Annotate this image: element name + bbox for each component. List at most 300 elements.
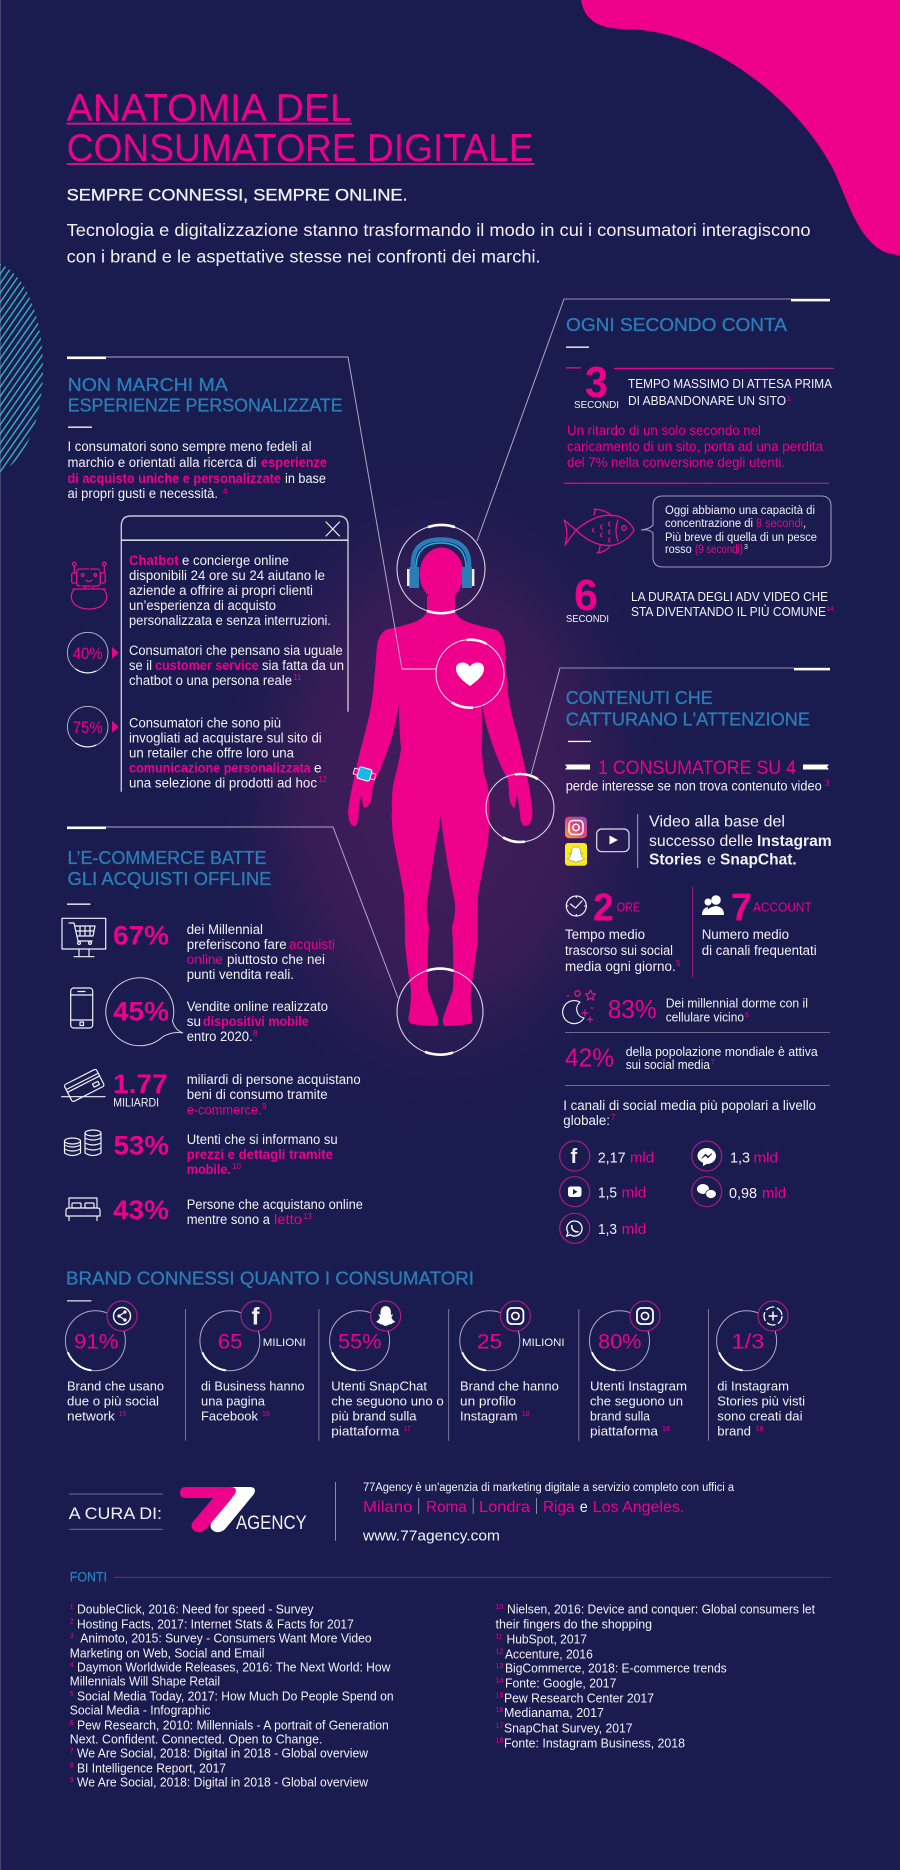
heading: GLI ACQUISTI OFFLINE [68, 868, 272, 889]
sources: left column: BI Intelligence Report, 2017 [77, 1760, 226, 1775]
text: video: SnapChat. [720, 851, 797, 868]
text: social channels: I canali di social media più popolari a livello [563, 1098, 816, 1113]
sources: left column: Daymon Worldwide Releases, 2016: The Next World: How [77, 1660, 391, 1675]
stat: youtube [560, 1177, 646, 1207]
icon: credit card [62, 1069, 105, 1102]
sources: left column: Pew Research, 2010: Millennials - A portrait of Generation [77, 1718, 389, 1733]
stat: 2 ore [565, 887, 681, 974]
text: 67%: dei Millennial [187, 922, 263, 937]
text: 40%: sia fatta da un [262, 658, 344, 673]
callout: speech bubble: rosso [665, 544, 692, 556]
stat: 65 milioni: di Business hanno [201, 1379, 305, 1394]
stat: 83%: 6 [745, 1012, 749, 1019]
head circle [397, 525, 485, 613]
stat: 25 milioni: 25 [477, 1330, 502, 1354]
sources: left column: 8 [70, 1763, 74, 1770]
stat: 75%: 75% [73, 718, 103, 737]
heart circle [436, 640, 504, 708]
sources: left column: Hosting Facts, 2017: Internet Stats & Facts for 2017 [77, 1616, 354, 1631]
sources: right column: Medianama, 2017 [504, 1705, 604, 1720]
pink paragraph [567, 422, 823, 470]
sources: left column: DoubleClick, 2016: Need for speed - Survey [77, 1602, 314, 1617]
sources: right column: 16 [496, 1707, 504, 1714]
stat: 80%: 80% [598, 1330, 642, 1354]
sources: right column: their fingers do the shopping [496, 1617, 652, 1632]
stat: 7 account: ACCOUNT [753, 901, 812, 915]
icon: instagram outline [630, 1301, 660, 1331]
stat: facebook: 2,17 [598, 1149, 626, 1166]
text: 67% [187, 922, 335, 982]
decorative striped shape [0, 262, 43, 474]
stat: 55%: piattaforma [331, 1424, 400, 1439]
stat: 80% [590, 1301, 687, 1439]
sources: right column: Pew Research Center 2017 [504, 1690, 654, 1705]
sources: left column: We Are Social, 2018: Digital in 2018 - Global overview [77, 1775, 369, 1790]
text: 45%: su [187, 1014, 201, 1029]
icon: stories plus [758, 1301, 788, 1331]
text: 75%: e [314, 761, 322, 776]
stat: 1/3: Stories più visti [717, 1394, 805, 1409]
callout: speech bubble: , [803, 518, 806, 530]
sources: left column: 2 [70, 1619, 74, 1626]
text: 75% [129, 716, 327, 791]
stat: 55%: più brand sulla [331, 1409, 417, 1424]
stat: 6 secondi: STA DIVENTANDO IL PIÙ COMUNE [631, 604, 826, 619]
hand circle [486, 774, 554, 842]
text: 75%: 12 [318, 775, 327, 784]
subtitle: SEMPRE CONNESSI, SEMPRE ONLINE. [67, 186, 408, 205]
stat: 1/3: 18 [756, 1424, 764, 1433]
connector line to feet [67, 826, 398, 998]
text: agency description: www.77agency.com [362, 1528, 500, 1545]
stat: 1 consumatore su 4 [565, 758, 830, 794]
icon: people [702, 895, 724, 915]
stat: 3 secondi: DI ABBANDONARE UN SITO [628, 393, 786, 408]
text: 45% [187, 999, 328, 1044]
text: 75%: una selezione di prodotti ad hoc [129, 776, 317, 791]
stat: 55%: 17 [404, 1424, 410, 1433]
icon: share [107, 1301, 137, 1331]
callout: speech bubble: 8 secondi [756, 518, 803, 530]
stat: 6 secondi: 14 [826, 606, 834, 613]
stat: 67%: 67% [113, 920, 169, 950]
sources: left column: Marketing on Web, Social and Email [70, 1645, 264, 1660]
stat: 65 milioni: 65 [218, 1330, 242, 1354]
text: agency description: Roma [426, 1499, 467, 1516]
body silhouette [348, 548, 532, 1026]
stat: wechat: mld [762, 1185, 786, 1202]
stat: 25 milioni: un profilo [460, 1394, 516, 1409]
intro text: marchio e orientati alla ricerca di [68, 455, 256, 470]
stat: messenger [692, 1141, 778, 1171]
text: chatbot: aziende a offrire ai propri clienti [129, 583, 313, 598]
callout: speech bubble: (9 secondi) [695, 544, 743, 556]
sources: left column: 4 [70, 1662, 74, 1669]
connector line to heart [67, 356, 436, 669]
icon: snapchat ghost [371, 1301, 401, 1331]
sources: right column: 13 [496, 1663, 504, 1670]
stat: messenger: 1,3 [730, 1149, 750, 1166]
text: agency description: Londra [479, 1499, 530, 1516]
sources: right column: 18 [496, 1738, 504, 1744]
stat: 6 secondi: LA DURATA DEGLI ADV VIDEO CHE [631, 589, 828, 604]
stat: 53%: 53% [114, 1130, 169, 1160]
text: social channels [563, 1098, 816, 1128]
text: 75%: un retailer che offre loro una [129, 746, 294, 761]
logo: 77 agency: AGENCY [236, 1513, 307, 1534]
icon: snapchat [565, 843, 587, 866]
stat: 1/3 [717, 1301, 805, 1439]
sources: right column: HubSpot, 2017 [506, 1631, 587, 1646]
text: 40%: Consumatori che pensano sia uguale [129, 643, 343, 658]
icon: moon and stars [563, 990, 596, 1024]
text: 43%: 13 [303, 1212, 312, 1221]
text: 43%: letto [274, 1212, 302, 1227]
stat: 91%: due o più social [67, 1394, 159, 1409]
icon: headphones [407, 540, 474, 588]
sources: right column: 10 [496, 1604, 504, 1611]
stat: 40% [67, 632, 119, 673]
sources: left column: 3 [70, 1633, 74, 1640]
text: 1.77 [187, 1072, 361, 1117]
pink paragraph: caricamento di un sito, porta ad una perdita [567, 438, 823, 454]
callout: speech bubble: Più breve di quella di un pesce [665, 532, 817, 544]
stat: wechat [692, 1177, 786, 1207]
callout: speech bubble [641, 496, 831, 567]
icon: facebook: f [252, 1304, 260, 1330]
icon: coins [64, 1130, 101, 1156]
stat: 1 consumatore su 4: perde interesse se non trova contenuto video [566, 779, 822, 794]
stat: 91%: 15 [118, 1409, 126, 1418]
text: agency description: Milano [363, 1499, 412, 1516]
stat: 91%: Brand che usano [67, 1379, 164, 1394]
stat: 43%: 43% [113, 1195, 169, 1225]
stat: 6 secondi: SECONDI [566, 613, 609, 625]
panel: contenuti che catturano l'attenzione [531, 668, 832, 1243]
text: video: Stories [649, 851, 702, 868]
text: 45%: entro 2020. [187, 1029, 253, 1044]
text: chatbot [129, 553, 331, 628]
stat: youtube: 1,5 [598, 1184, 617, 1201]
stat: 91%: 91% [74, 1330, 118, 1354]
icon: video play [597, 829, 629, 852]
sources: left column: Next. Confident. Connected. Open to Change. [70, 1732, 322, 1747]
heading: CATTURANO L'ATTENZIONE [566, 709, 810, 730]
stat: wechat: 0,98 [729, 1185, 757, 1202]
stat: 1 consumatore su 4: 3 [825, 779, 830, 788]
panel: non marchi ma esperienze personalizzate [67, 356, 436, 792]
sources: right column: Fonte: Google, 2017 [505, 1675, 616, 1690]
connector line to hand [531, 668, 830, 774]
sources: right column: BigCommerce, 2018: E-commerce trends [505, 1661, 727, 1676]
stat: 83% [563, 990, 808, 1025]
text: social channels: 7 [611, 1113, 616, 1122]
intro paragraph: con i brand e le aspettative stesse nei confronti dei marchi. [67, 247, 541, 267]
stat: 7 account: di canali frequentati [702, 943, 817, 958]
text: 75%: invogliati ad acquistare sul sito di [129, 731, 322, 746]
text: 1.77: 9 [262, 1102, 267, 1111]
intro paragraph [67, 220, 811, 267]
stat: 80%: brand sulla [590, 1409, 651, 1424]
stat: 42%: 7 [711, 1059, 715, 1066]
icon: bed [66, 1198, 100, 1220]
text: agency description: 77Agency è un'agenzia di marketing digitale a servizio completo con uffici a [363, 1482, 735, 1494]
text: 53%: mobile. [187, 1162, 231, 1177]
text: chatbot: personalizzata e senza interruzioni. [129, 613, 331, 628]
intro paragraph: Tecnologia e digitalizzazione stanno trasformando il modo in cui i consumatori interagiscono [67, 220, 811, 240]
sources: left column: We Are Social, 2018: Digital in 2018 - Global overview [77, 1746, 369, 1761]
intro text: ai propri gusti e necessità. [68, 486, 218, 501]
stat: 40%: 40% [73, 644, 103, 663]
text: 40% [129, 643, 344, 688]
text: 43%: Persone che acquistano online [187, 1197, 363, 1212]
text: video: Video alla base del [649, 814, 785, 831]
text: chatbot: e concierge online [182, 553, 289, 568]
stat: 65 milioni: Facebook [201, 1409, 258, 1424]
callout: speech bubble: 3 [744, 544, 748, 551]
text: agency description: e [580, 1499, 588, 1516]
stat: 1/3: sono creati dai [717, 1409, 803, 1424]
pink paragraph: del 7% nella conversione degli utenti. [567, 454, 785, 470]
icon: instagram outline [500, 1301, 530, 1331]
sources: left column: Millennials Will Shape Retail [70, 1674, 220, 1689]
intro text: I consumatori sono sempre meno fedeli al [68, 439, 312, 454]
text: 75%: Consumatori che sono più [129, 716, 281, 731]
decorative pink blob [581, 0, 900, 255]
stat: facebook [560, 1141, 654, 1171]
stat: 83%: cellulare vicino [666, 1011, 744, 1025]
text: agency description: Riga [543, 1499, 575, 1516]
text: social channels: globale: [563, 1113, 610, 1128]
stat: whatsapp [560, 1213, 646, 1243]
stat: 55% [330, 1301, 444, 1439]
text: video: Instagram [757, 833, 832, 850]
logo: 77 agency [180, 1487, 307, 1534]
heading: OGNI SECONDO CONTA [566, 314, 788, 335]
stat: 42% [565, 1043, 818, 1073]
heading [566, 687, 810, 742]
central glow [191, 430, 691, 1150]
icon: heart [456, 662, 484, 686]
sources: left column: Social Media Today, 2017: How Much Do People Spend on [77, 1689, 394, 1704]
icon: phone [71, 988, 93, 1028]
stat: messenger: mld [754, 1149, 778, 1166]
stat: 42%: 42% [565, 1043, 614, 1073]
text: 40%: 11 [293, 673, 302, 682]
heading: ESPERIENZE PERSONALIZZATE [68, 395, 343, 416]
text: 1.77: e-commerce. [187, 1102, 262, 1117]
stat: 6 secondi [566, 571, 834, 625]
panel: e-commerce [62, 826, 398, 1227]
stat: 2 ore: trascorso sui social [565, 943, 673, 958]
text: chatbot: Chatbot [129, 553, 179, 568]
stat: 7 account: 7 [731, 887, 752, 930]
text: 43% [187, 1197, 363, 1227]
stat: 2 ore: media ogni giorno. [565, 959, 676, 974]
stat: 1/3: di Instagram [717, 1379, 789, 1394]
icon: fish [564, 509, 634, 553]
title [67, 87, 535, 170]
text: 67%: preferiscono fare [187, 937, 287, 952]
stat: 65 milioni: 16 [262, 1409, 270, 1418]
stat: 25 milioni: MILIONI [522, 1337, 565, 1349]
stat: 3 secondi: SECONDI [574, 399, 619, 411]
stat: 7 account [702, 887, 817, 958]
heading [67, 847, 272, 905]
stat: 25 milioni: Brand che hanno [460, 1379, 559, 1394]
stat: 2 ore: 2 [593, 887, 614, 930]
sources: right column: 11 [496, 1634, 503, 1640]
text: 53% [187, 1132, 338, 1177]
stat: youtube: mld [622, 1184, 646, 1201]
stat: 80%: che seguono un [590, 1394, 683, 1409]
text: 40%: se il [129, 658, 152, 673]
feet circle [397, 969, 483, 1055]
text: 45%: dispositivi mobile [203, 1014, 309, 1029]
stat: 55%: 55% [338, 1330, 382, 1354]
stat: 42%: sui social media [626, 1058, 710, 1072]
icon: chatbot [71, 562, 107, 609]
text: 53%: Utenti che si informano su [187, 1132, 338, 1147]
text: 67%: acquisti [289, 937, 335, 952]
stat: 80%: piattaforma [590, 1424, 659, 1439]
stat: 2 ore: Tempo medio [565, 927, 645, 942]
stat: 2 ore: 5 [676, 959, 681, 968]
icon: smart watch [352, 765, 377, 783]
stat: whatsapp: mld [622, 1221, 646, 1238]
stat: 65 milioni: una pagina [201, 1394, 266, 1409]
sources: right column: 14 [496, 1678, 504, 1684]
stat: 80%: Utenti Instagram [590, 1379, 687, 1394]
stat: 1/3: brand [717, 1424, 751, 1439]
title: CONSUMATORE DIGITALE [67, 127, 534, 170]
stat: 55%: Utenti SnapChat [331, 1379, 427, 1394]
stat: 7 account: Numero medio [702, 927, 789, 942]
sources: left column: 7 [70, 1748, 74, 1755]
stat: 45% in speech bubble [106, 978, 183, 1046]
sources: right column: 15 [496, 1692, 504, 1700]
heading [68, 374, 343, 428]
text: video: e [707, 851, 716, 868]
text: 45%: 8 [253, 1029, 258, 1038]
credit: a cura di: A CURA DI: [69, 1504, 162, 1523]
text: 53%: 10 [232, 1162, 241, 1171]
sources: right column: 12 [496, 1648, 504, 1656]
text: chatbot: un’esperienza di acquisto [129, 598, 276, 613]
text: 1.77: miliardi di persone acquistano [187, 1072, 361, 1087]
connector line to head [477, 299, 830, 541]
sources: left column [70, 1602, 394, 1790]
stat: 80%: 18 [662, 1424, 670, 1433]
stat: 65 milioni: MILIONI [263, 1337, 306, 1349]
stat: 3 secondi: 3 [585, 358, 608, 407]
callout: speech bubble: Oggi abbiamo una capacità di [665, 505, 815, 517]
stat: 3 secondi [566, 358, 834, 411]
sources: left column: 6 [70, 1720, 74, 1727]
stat: 1.77 miliardi: 1.77 [113, 1069, 168, 1099]
title: ANATOMIA DEL [67, 87, 352, 130]
stat: 1 consumatore su 4: 1 CONSUMATORE SU 4 [598, 758, 796, 779]
panel: ogni secondo conta [477, 299, 834, 625]
sources: left column: 1 [70, 1604, 74, 1611]
text: 40%: chatbot o una persona reale [129, 673, 292, 688]
heading: BRAND CONNESSI QUANTO I CONSUMATORI [66, 1269, 474, 1289]
stat: 91% [65, 1301, 164, 1424]
intro text: esperienze [261, 455, 327, 470]
heading: L’E-COMMERCE BATTE [68, 847, 266, 868]
stat: 65 milioni [200, 1301, 306, 1424]
sources: left column: 5 [70, 1691, 74, 1698]
stat: 42%: della popolazione mondiale è attiva [626, 1045, 818, 1059]
sources: right column: Nielsen, 2016: Device and conquer: Global consumers let [507, 1602, 815, 1617]
sources: right column: SnapChat Survey, 2017 [504, 1720, 633, 1735]
text: video [649, 814, 832, 868]
sources: left column: Social Media - Infographic [70, 1703, 211, 1718]
text: 75%: comunicazione personalizzata [129, 761, 311, 776]
text: 43%: mentre sono a [187, 1212, 270, 1227]
text: video: successo delle [649, 833, 753, 850]
text: 67%: piuttosto che nei [227, 952, 325, 967]
sources: left column: 9 [70, 1777, 74, 1784]
human figure [348, 540, 532, 1026]
sources: right column: Fonte: Instagram Business, 2018 [504, 1735, 685, 1750]
text: 67%: online [187, 952, 223, 967]
stat: 83%: 83% [608, 994, 657, 1024]
stat: 55%: che seguono uno o [331, 1394, 444, 1409]
intro text: di acquisto uniche e personalizzate [68, 471, 281, 486]
heading: CONTENUTI CHE [566, 687, 713, 708]
text: 67%: punti vendita reali. [187, 967, 294, 982]
panel: brand connessi [65, 1269, 805, 1441]
stat: 25 milioni: Instagram [460, 1409, 518, 1424]
text: 40%: customer service [155, 658, 259, 673]
stat: facebook: f [570, 1146, 578, 1168]
intro text: 4 [223, 487, 228, 496]
stat: 2 ore: ORE [617, 901, 640, 915]
intro text [68, 439, 327, 501]
stat: 25 milioni [460, 1301, 565, 1424]
text: 53%: prezzi e dettagli tramite [187, 1147, 333, 1162]
credit: a cura di [69, 1494, 163, 1530]
pink paragraph: Un ritardo di un solo secondo nel [567, 422, 761, 438]
stat: 25 milioni: 18 [522, 1409, 530, 1418]
stat: 1/3: 1/3 [731, 1330, 764, 1354]
text: agency description [362, 1482, 735, 1545]
window frame [121, 516, 348, 792]
stat: 75% [67, 706, 119, 747]
icon: monitor with cart [62, 918, 106, 957]
text: agency description: Los Angeles. [593, 1499, 684, 1516]
sources heading: FONTI [70, 1570, 107, 1585]
text: chatbot: disponibili 24 ore su 24 aiutano le [129, 568, 325, 583]
callout: speech bubble: concentrazione di [665, 518, 753, 530]
stat: 1.77 miliardi: MILIARDI [113, 1098, 159, 1110]
sources: right column: Accenture, 2016 [505, 1646, 593, 1661]
icon: clock [566, 896, 586, 916]
stat: whatsapp: 1,3 [598, 1221, 617, 1238]
intro text: in base [285, 471, 326, 486]
sources: right column [496, 1602, 815, 1750]
stat: facebook: mld [630, 1149, 654, 1166]
icon: instagram [565, 817, 587, 838]
heading: NON MARCHI MA [68, 374, 228, 395]
stat: 45% in speech bubble: 45% [113, 997, 169, 1027]
stat: 83%: Dei millennial dorme con il [666, 997, 808, 1011]
sources: right column: 17 [496, 1722, 504, 1730]
stat: 3 secondi: 1 [787, 396, 791, 403]
sources: left column: Animoto, 2015: Survey - Consumers Want More Video [80, 1631, 372, 1646]
text: 45%: Vendite online realizzato [187, 999, 328, 1014]
